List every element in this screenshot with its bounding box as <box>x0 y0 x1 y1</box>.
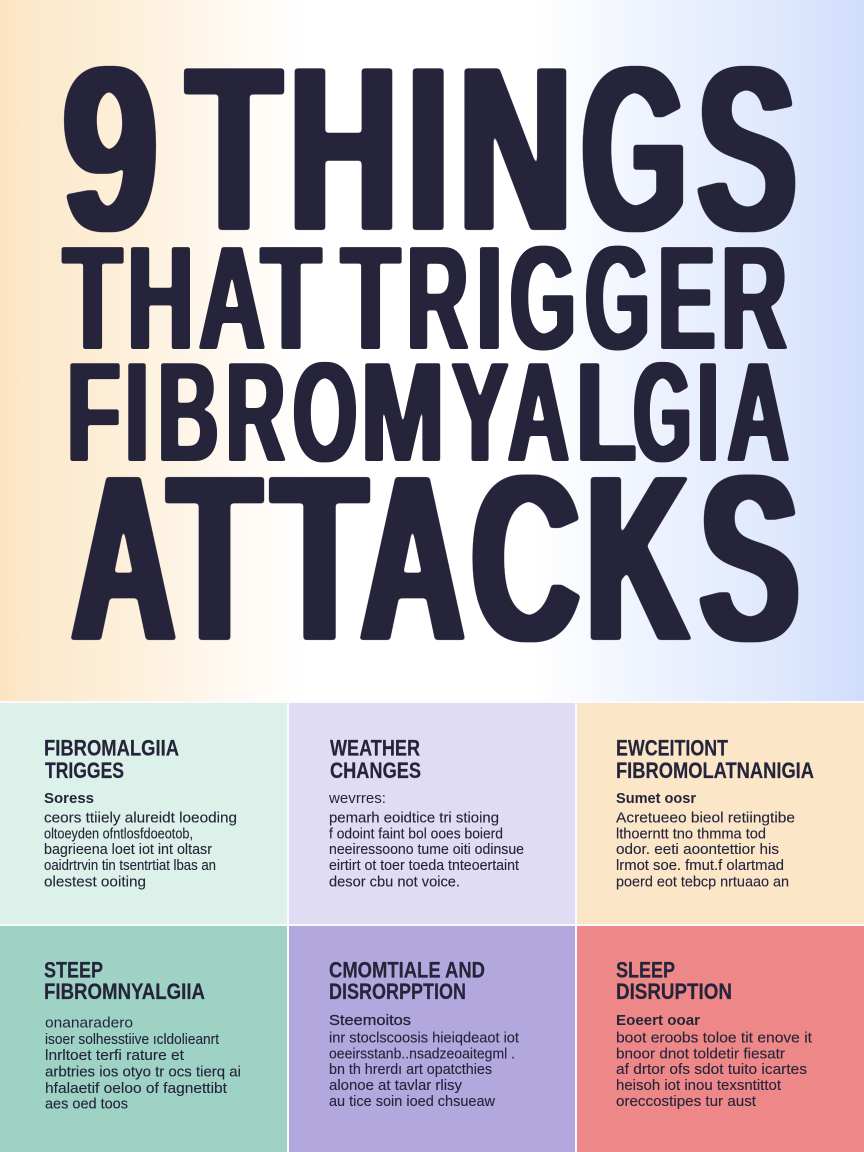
panel body text: neeiressoono tume oiti odinsue <box>329 841 524 858</box>
title line 4: T <box>272 426 367 691</box>
panel: cmomtiale and disrorpption <box>289 926 575 1152</box>
title line 1: G <box>582 17 687 280</box>
panel body text <box>616 1030 813 1110</box>
title line 2: E <box>658 216 715 381</box>
title line 4: A <box>72 426 175 691</box>
panel body text: hfalaetif oeloo of fagnettibt <box>45 1080 228 1097</box>
panel: emotional fibromyalgia <box>577 703 864 924</box>
title line 2: T <box>261 216 321 381</box>
panel heading <box>330 736 421 783</box>
panel body text: alonoe at tavlar rlisy <box>329 1077 462 1094</box>
title line 1: T <box>187 17 281 280</box>
title line 1: 9 <box>62 17 158 280</box>
panel body text: desor cbu not voice. <box>329 874 460 890</box>
panel body text: eirtirt ot toer toeda tnteoertaint <box>329 857 520 874</box>
title line 1: S <box>697 17 797 280</box>
panel body text <box>45 1031 241 1112</box>
panel background <box>0 926 287 1152</box>
panel body text: au tice soin ioed chsueaw <box>329 1093 495 1110</box>
panel body text <box>329 1030 520 1110</box>
title line 2: I <box>476 216 503 381</box>
panel body text: lnrltoet terfi rature et <box>45 1047 185 1064</box>
panel body text: Acretueeo bieol retiingtibe <box>616 810 795 826</box>
panel body text: odor. eeti aoontettior his <box>616 841 779 858</box>
panel body text <box>329 810 524 890</box>
panel subheading: wevrres: <box>328 790 386 807</box>
panel body text: heisoh iot inou texsntittot <box>616 1077 782 1094</box>
panel background <box>0 703 287 924</box>
panel body text: ceors ttiiely alureidt loeoding <box>44 810 237 826</box>
panel heading: STEEP <box>44 958 103 982</box>
panel heading <box>44 958 205 1004</box>
panel heading: DISRORPPTION <box>329 979 466 1004</box>
panel heading: SLEEP <box>616 958 675 982</box>
panel heading <box>329 958 485 1004</box>
panel heading <box>616 958 732 1004</box>
title line 4: A <box>361 426 464 691</box>
panel backing <box>0 701 864 1152</box>
panel background <box>289 703 575 924</box>
panel: weather changes <box>289 703 575 924</box>
panel body text <box>44 810 237 890</box>
title line 3: L <box>576 333 636 492</box>
panel body text: oreccostipes tur aust <box>616 1093 757 1110</box>
title <box>62 17 799 691</box>
panel body text: aes oed toos <box>45 1096 128 1112</box>
title line 3: I <box>698 333 718 492</box>
panel subheading: Eoeert ooar <box>616 1012 700 1029</box>
title line 4: K <box>586 426 688 691</box>
panel heading: CHANGES <box>330 758 421 783</box>
title line 2: A <box>199 216 265 381</box>
panel body text: arbtries ios otyo tr ocs tierq ai <box>45 1064 241 1080</box>
panel body text: bnoor dnot toldetir fiesatr <box>616 1046 785 1062</box>
panel heading: TRIGGES <box>45 758 124 783</box>
panel subheading: Soress <box>44 790 94 807</box>
panel heading: WEATHER <box>330 736 420 760</box>
panel heading: CMOMTIALE AND <box>329 958 485 982</box>
panel body text: lthoerntt tno thmma tod <box>616 826 766 842</box>
panel heading: EWCEITIONT <box>616 736 728 760</box>
title line 2: G <box>585 216 650 381</box>
title line 3: B <box>158 333 218 492</box>
panel heading: FIBROMNYALGIIA <box>44 979 205 1004</box>
panel body text: bn th hrerdı art opatcthies <box>329 1061 492 1078</box>
title line 3: I <box>125 333 149 492</box>
panel: fibromyalgia triggers <box>0 703 287 924</box>
title line 4: C <box>471 426 580 691</box>
panel heading <box>44 736 179 783</box>
title line 3: O <box>293 333 357 492</box>
panel body text: f odoint faint bol ooes boierd <box>329 826 503 842</box>
panel body text: af drtor ofs sdot tuito icartes <box>616 1061 807 1078</box>
title line 4: S <box>700 426 799 691</box>
title line 3: Y <box>452 333 508 492</box>
title line 2: R <box>721 216 787 381</box>
title line 1: I <box>407 17 449 280</box>
panel body text: oeeirsstanb..nsadzeoaitegml . <box>329 1046 515 1062</box>
title line 3: F <box>67 333 120 492</box>
title line 4: T <box>168 426 261 691</box>
title line 2: R <box>407 216 468 381</box>
title line 3: G <box>634 333 691 492</box>
panel subheading: Steemoitos <box>329 1012 411 1029</box>
title line 3: R <box>226 333 285 492</box>
panel background <box>577 703 864 924</box>
panel heading: FIBROMALGIIA <box>44 736 179 760</box>
title line 2: T <box>63 216 122 381</box>
panel subheading: onanaradero <box>45 1014 133 1032</box>
panel: steep fibromyalgia <box>0 926 287 1152</box>
panel subheading: Sumet oosr <box>616 790 696 807</box>
panel body text <box>616 810 795 890</box>
panel background <box>577 926 864 1152</box>
panel: sleep disruption <box>577 926 864 1152</box>
panel body text: lrmot soe. fmut.f olartmad <box>616 857 784 874</box>
title line 3: M <box>361 333 444 492</box>
title line 1: N <box>458 17 572 280</box>
title line 2: H <box>127 216 194 381</box>
title line 2: G <box>510 216 576 381</box>
panel body text: isoer solhesstiive ıcldolieanrt <box>45 1031 220 1048</box>
panel body text: boot eroobs toloe tit enove it <box>616 1030 813 1046</box>
panel body text: poerd eot tebcp nrtuaao an <box>616 874 789 890</box>
panel body text: bagrieena loet iot int oltasr <box>44 841 212 858</box>
title line 3: A <box>508 333 569 492</box>
panel body text: olestest ooiting <box>44 874 146 890</box>
panel body text: oaidrtrvin tin tsentrtiat lbas an <box>44 857 216 874</box>
panel background <box>289 926 575 1152</box>
panel heading <box>616 736 814 783</box>
panel body text: oltoeyden ofntlosfdoeotob, <box>44 826 193 842</box>
panel body text: pemarh eoidtice tri stioing <box>329 810 499 826</box>
title line 2: T <box>341 216 400 381</box>
title line 3: A <box>728 333 789 492</box>
panel heading: FIBROMOLATNANIGIA <box>616 758 814 783</box>
panel heading: DISRUPTION <box>616 979 732 1004</box>
title line 1: H <box>289 17 398 280</box>
panel body text: inr stoclscoosis hieiqdeaot iot <box>329 1030 520 1046</box>
